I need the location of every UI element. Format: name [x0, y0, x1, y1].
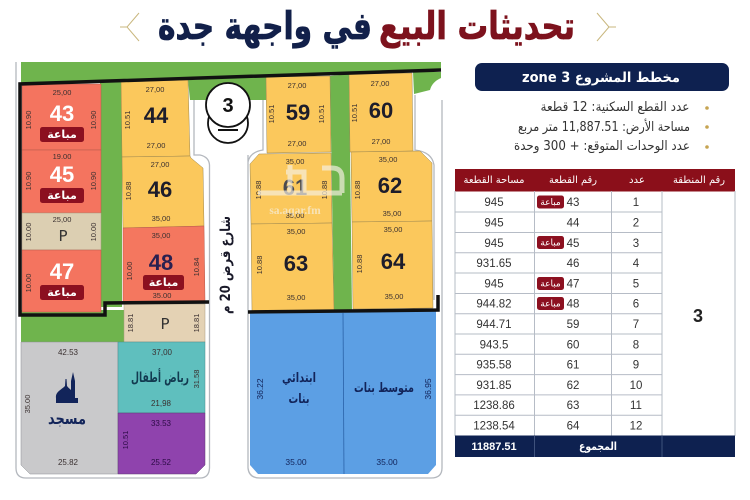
lot 44: 44: [144, 103, 169, 128]
lot 47: مباعة: [47, 286, 77, 299]
table zone cell: 3: [693, 306, 703, 326]
lot 48: 10.84: [192, 258, 201, 276]
lot 63: 35,00: [287, 227, 305, 236]
parking lot upper: 10.00: [24, 223, 33, 241]
table rows: 11: [630, 400, 642, 412]
table rows: 945: [484, 238, 504, 250]
table rows: 2: [633, 218, 639, 230]
table rows: 944.71: [476, 319, 512, 331]
lot 62: 62: [378, 173, 402, 198]
table rows: 64: [567, 420, 580, 432]
black boundary lines: [20, 70, 441, 315]
table rows: 935.58: [476, 360, 512, 372]
school plots: 35.00: [376, 457, 398, 467]
table rows: [473, 197, 642, 432]
lot 60: [349, 73, 413, 152]
lot 59: 10.51: [317, 105, 326, 123]
table total row: المجموع: [579, 440, 617, 453]
lot 62: [351, 151, 432, 222]
table rows: 931.65: [476, 258, 512, 270]
watermark: sa.aqar.fm: [269, 205, 321, 217]
project facts list: عدد الوحدات المتوقع: + 300 وحدة: [514, 139, 690, 154]
lot 48: 35.00: [153, 291, 171, 300]
lot 47: 47: [50, 259, 74, 284]
parking lot upper: [22, 213, 101, 250]
watermark: [258, 165, 342, 217]
table rows: 45: [567, 238, 579, 250]
table rows: 1238.86: [473, 400, 515, 412]
table rows: 945: [484, 218, 504, 230]
table rows: 62: [567, 380, 579, 392]
lot 44: 10.51: [123, 111, 132, 129]
table rows: 4: [633, 258, 640, 270]
lot 46: [122, 156, 204, 228]
lot 64: 64: [381, 249, 406, 274]
sold badges in table: مباعة: [540, 300, 561, 310]
table rows: 44: [567, 218, 580, 230]
lot 44: [121, 80, 190, 157]
parking lot upper: 10.00: [89, 223, 98, 241]
school plots: 35.00: [285, 457, 307, 467]
table rows: 7: [633, 319, 639, 331]
project header bar: [475, 63, 729, 91]
purple plot: 10.51: [121, 431, 130, 449]
lot 48: 10.00: [125, 262, 134, 280]
table header: عدد: [629, 175, 645, 186]
table rows: 47: [567, 278, 579, 290]
table rows: 59: [567, 319, 579, 331]
lot 63: [251, 223, 334, 311]
kindergarten plot: [118, 342, 205, 413]
sold badges in table: مباعة: [540, 198, 561, 208]
kindergarten plot: 31.58: [192, 370, 201, 388]
kindergarten plot: 21,98: [151, 399, 172, 408]
table rows: 1238.54: [473, 420, 515, 432]
table header: [455, 169, 735, 192]
lot 63: 35,00: [287, 293, 305, 302]
lot 48: مباعة: [149, 276, 178, 289]
lot 64: [352, 221, 433, 309]
lot 61: 35,00: [286, 211, 304, 220]
lot 45: 10.90: [89, 172, 98, 190]
table rows: 48: [567, 299, 579, 311]
table rows: 6: [633, 299, 639, 311]
mosque plot: مسجد: [48, 409, 86, 428]
school plots: متوسط بنات: [354, 381, 414, 396]
lot 43: [22, 84, 101, 150]
school plots: [250, 311, 436, 474]
lot 63: 63: [284, 251, 308, 276]
purple plot: 25.52: [151, 458, 172, 467]
lot 43: مباعة: [47, 128, 77, 141]
table rows: 63: [567, 400, 579, 412]
lot 48: 35,00: [152, 231, 170, 240]
title: تحديثات البيع: [379, 4, 575, 48]
lot 61: 61: [283, 175, 307, 200]
lot 46: 27,00: [151, 160, 169, 169]
lot 45: 45: [50, 162, 74, 187]
table rows: 9: [633, 360, 639, 372]
title: [158, 4, 575, 49]
table rows: 60: [567, 339, 579, 351]
project header bar: مخطط المشروع zone 3: [522, 70, 680, 86]
lot 44: 27,00: [147, 141, 165, 150]
lot 61: 35,00: [286, 157, 304, 166]
school plots: 36.22: [255, 378, 265, 400]
parking lot lower: P: [160, 315, 170, 333]
lot 59: 59: [286, 100, 310, 125]
table rows: 5: [633, 278, 639, 290]
table header: مساحة القطعة: [464, 175, 524, 186]
table rows: 12: [630, 420, 642, 432]
mosque plot: [21, 342, 118, 474]
project facts list: [514, 100, 709, 154]
icon: mosque: [56, 372, 78, 403]
table header: رقم القطعة: [549, 175, 597, 186]
lot 59: [266, 76, 331, 153]
mosque plot: 25.82: [58, 458, 79, 467]
sold badges in table: [537, 196, 564, 310]
lot 59: 27,00: [288, 81, 306, 90]
parking lot upper: 25,00: [53, 215, 71, 224]
lot 60: 27,00: [372, 137, 390, 146]
lot 45: [22, 150, 101, 213]
school plots: بنات: [288, 392, 310, 407]
lot 45: 10.90: [24, 172, 33, 190]
lot 63: 10.88: [255, 256, 264, 274]
lot 46: 35,00: [152, 214, 170, 223]
lot 60: 27,00: [371, 79, 389, 88]
lot 64: 35,00: [385, 292, 403, 301]
lot 45: مباعة: [47, 189, 77, 202]
lot 61: 10.88: [320, 181, 329, 199]
mosque plot: 42.53: [58, 348, 79, 357]
table rows: 943.5: [480, 339, 508, 351]
school plots: ابتدائي: [282, 371, 316, 386]
green top band: [21, 62, 441, 83]
lot 43: 25,00: [53, 88, 71, 97]
plots table: [455, 169, 735, 457]
table rows: 945: [484, 197, 504, 209]
lot 47: 10.00: [24, 274, 33, 292]
table rows: 944.82: [476, 299, 512, 311]
table rows: 46: [567, 258, 579, 270]
lot 62: 35,00: [383, 209, 401, 218]
lot 64: 35,00: [384, 225, 402, 234]
table total row: 11887.51: [471, 441, 517, 453]
project facts list: عدد القطع السكنية: 12 قطعة: [540, 100, 690, 115]
table rows: 945: [484, 278, 504, 290]
mosque plot: 35.00: [23, 395, 32, 413]
lot 62: 35,00: [379, 155, 397, 164]
table rows: 1: [633, 197, 639, 209]
table rows: 3: [633, 238, 639, 250]
school plots: 36.95: [423, 378, 433, 400]
lot 46: 10.88: [124, 182, 133, 200]
lot 44: 27,00: [146, 85, 164, 94]
lot 59: 27,00: [288, 139, 306, 148]
lot 43: 10.90: [89, 111, 98, 129]
zone number circle: 3: [222, 95, 234, 117]
kindergarten plot: رياض أطفال: [131, 368, 189, 386]
lot 43: 10.90: [24, 111, 33, 129]
kindergarten plot: 37,00: [152, 348, 173, 357]
lot 47: [22, 250, 101, 312]
lot 64: 10.88: [355, 255, 364, 273]
table total row: [455, 436, 735, 457]
lot 62: 10.88: [353, 181, 362, 199]
table header: رقم المنطقة: [673, 175, 725, 186]
lot 61: [250, 153, 332, 224]
purple plot: [118, 413, 205, 474]
site plan map: [16, 62, 442, 478]
table rows: 61: [567, 360, 579, 372]
table grid: [455, 191, 735, 436]
table rows: 10: [630, 380, 642, 392]
parking lot lower: 18.81: [126, 314, 135, 332]
zone number circle: [206, 83, 250, 143]
lot 46: 46: [148, 177, 172, 202]
lot 61: 10.88: [254, 181, 263, 199]
lot 60: 60: [369, 98, 393, 123]
purple plot: 33.53: [151, 419, 172, 428]
table rows: 8: [633, 339, 639, 351]
lot 48: 48: [149, 250, 173, 275]
lot 60: 10.51: [350, 104, 359, 122]
green strips: [21, 72, 441, 342]
sold badges in table: مباعة: [540, 280, 561, 290]
parking lot upper: P: [58, 227, 68, 245]
title: في واجهة جدة: [158, 4, 372, 49]
lot 48: [123, 226, 205, 303]
site frame: [16, 62, 442, 478]
project facts list: مساحة الأرض: 11,887.51 متر مربع: [518, 118, 690, 135]
parking lot lower: [124, 304, 205, 342]
sold badges in table: مباعة: [540, 238, 561, 248]
lot 45: 19.00: [53, 152, 71, 161]
street label: شارع قرض 20 م: [218, 216, 234, 314]
lot 43: 43: [50, 101, 74, 126]
lot 59: 10.51: [267, 105, 276, 123]
decorative title chevrons: [120, 13, 616, 41]
table rows: 931.85: [476, 380, 512, 392]
parking lot lower: 18.81: [192, 314, 201, 332]
table rows: 43: [567, 197, 579, 209]
